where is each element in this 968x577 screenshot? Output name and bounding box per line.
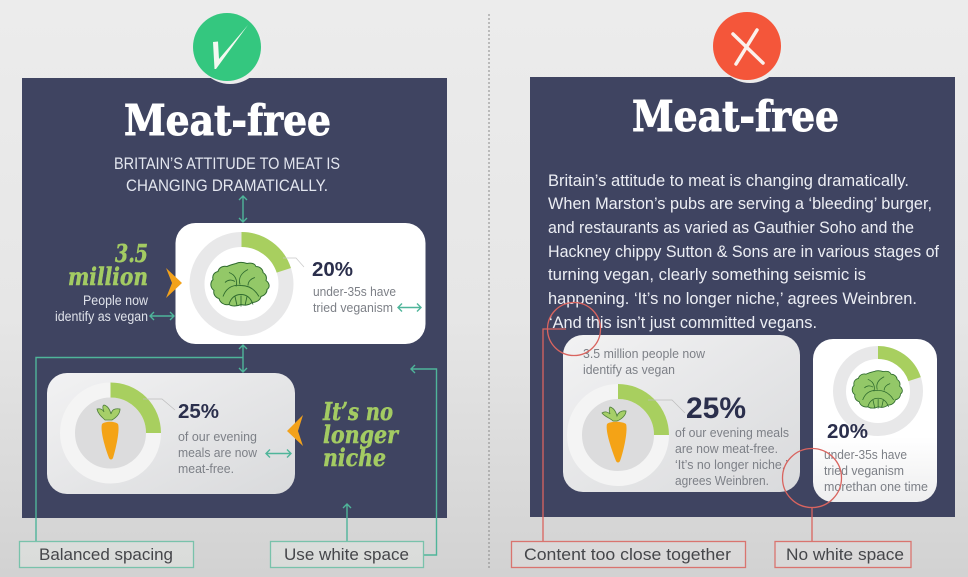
callout circle: no white space: [782, 448, 842, 508]
text: under-35s have tried veganism: [313, 284, 396, 315]
card: 25% evening meals: [47, 373, 295, 494]
stat: 3.5 million: 3.5: [115, 239, 148, 268]
text: of our evening meals: agrees Weinbren.: [675, 473, 769, 488]
card: 20% under-35s: [176, 223, 426, 344]
stat: 3.5 million: People now: [83, 293, 148, 308]
donut chart: 20%: [840, 352, 916, 430]
icon: carrot: [602, 407, 627, 462]
pull quote: It's no longer niche: It’s no: [322, 397, 393, 426]
text: of our evening meals: of our evening meals: [675, 425, 789, 440]
label: Use white space: [270, 542, 424, 568]
text: under-35s have tried veganism: tried veganism: [824, 463, 904, 478]
callout circle: content too close: [548, 302, 600, 356]
text: under-35s have tried veganism: [824, 447, 928, 494]
text: under-35s have tried veganism: tried veganism: [313, 300, 393, 315]
label: Use white space: Use white space: [284, 545, 409, 564]
text: under-35s have tried veganism: morethan one time: [824, 479, 928, 494]
icon: green check mark: [193, 13, 264, 84]
stat: 3.5 million: identify as vegan: [55, 309, 148, 324]
body text paragraph: When Marston’s pubs are serving a ‘bleeding’ burger,: [548, 195, 932, 213]
arrows: balanced spacing markers: [150, 196, 421, 458]
connector: no white space: [811, 508, 813, 541]
label: Balanced spacing: Balanced spacing: [39, 545, 173, 564]
subheading: [114, 155, 340, 195]
stat: 25%: 25%: [686, 392, 746, 425]
text: of our evening meals are now meat-free: of our evening: [178, 429, 257, 444]
pull quote: It's no longer niche: niche: [323, 443, 386, 472]
body text paragraph: turning vegan, clearly something seismic is: [548, 266, 866, 284]
donut chart: 25%: [68, 390, 154, 476]
body text paragraph: and restaurants as varied as Gauthier Soho and the: [548, 219, 914, 237]
stat: 20%: 20%: [827, 420, 868, 443]
connector: white space arrow to panel: [411, 365, 436, 555]
card: 25% with 3.5 million: [563, 335, 800, 492]
text: under-35s have tried veganism: under-35s have: [824, 447, 907, 462]
icon: carrot: [97, 405, 120, 460]
label: No white space: [775, 542, 911, 568]
body text paragraph: Hackney chippy Sutton & Sons are in various stages of: [548, 243, 939, 261]
text: under-35s have tried veganism: under-35s have: [313, 284, 396, 299]
text: 3.5 million people: 3.5 million people now: [583, 346, 705, 361]
panel: good example: [22, 13, 447, 518]
text: of our evening meals: [675, 425, 789, 488]
icon: red cross: [713, 12, 784, 83]
icon: orange chevron pointing right: [166, 268, 182, 298]
connector: content too close: [543, 329, 566, 541]
subheading: BRITAIN’S ATTITUDE TO MEAT IS: [114, 155, 340, 173]
label: Balanced spacing: [20, 542, 194, 568]
icon: lettuce: [852, 371, 902, 409]
icon: orange chevron pointing left: [287, 415, 303, 446]
body text paragraph: [548, 172, 939, 332]
donut chart: 25%: [574, 392, 662, 478]
stat: 25%: 25%: [178, 400, 219, 423]
connector: white space arrow up: [343, 504, 351, 541]
subheading: CHANGING DRAMATICALLY.: [126, 177, 328, 195]
text: 3.5 million people: [583, 346, 705, 377]
leader line: [143, 399, 175, 410]
label: Content too close together: Content too close together: [524, 545, 731, 564]
donut chart: 20%: [197, 240, 286, 328]
heading: Meat-free: Meat-free: [124, 96, 331, 145]
label: Content too close together: [512, 542, 746, 568]
stat: 3.5 million: [55, 239, 148, 324]
text: of our evening meals are now meat-free: [178, 429, 257, 476]
stat: 3.5 million: million: [68, 262, 148, 291]
body text paragraph: Britain’s attitude to meat is changing dramatically.: [548, 172, 909, 190]
pull quote: It's no longer niche: [322, 397, 400, 472]
text: of our evening meals are now meat-free: meals are now: [178, 445, 257, 460]
icon: lettuce: [211, 262, 269, 306]
text: of our evening meals are now meat-free: meat-free.: [178, 461, 234, 476]
heading: Meat-free: Meat-free: [632, 92, 839, 141]
connector: balanced spacing: [36, 358, 243, 541]
stat: 20%: 20%: [312, 258, 353, 281]
text: of our evening meals: are now meat-free.: [675, 441, 778, 456]
pull quote: It's no longer niche: longer: [323, 420, 400, 449]
card: 20% narrow: [813, 339, 937, 502]
leader line: [648, 400, 685, 413]
text: of our evening meals: ‘It’s no longer niche,’: [675, 457, 788, 472]
leader line: [283, 258, 304, 267]
text: 3.5 million people: identify as vegan: [583, 362, 675, 377]
body text paragraph: happening. ‘It’s no longer niche,’ agrees Weinbren.: [548, 290, 917, 308]
panel: bad example: [530, 12, 955, 517]
body text paragraph: ‘And this isn’t just committed vegans.: [549, 314, 817, 332]
label: No white space: No white space: [786, 545, 904, 564]
